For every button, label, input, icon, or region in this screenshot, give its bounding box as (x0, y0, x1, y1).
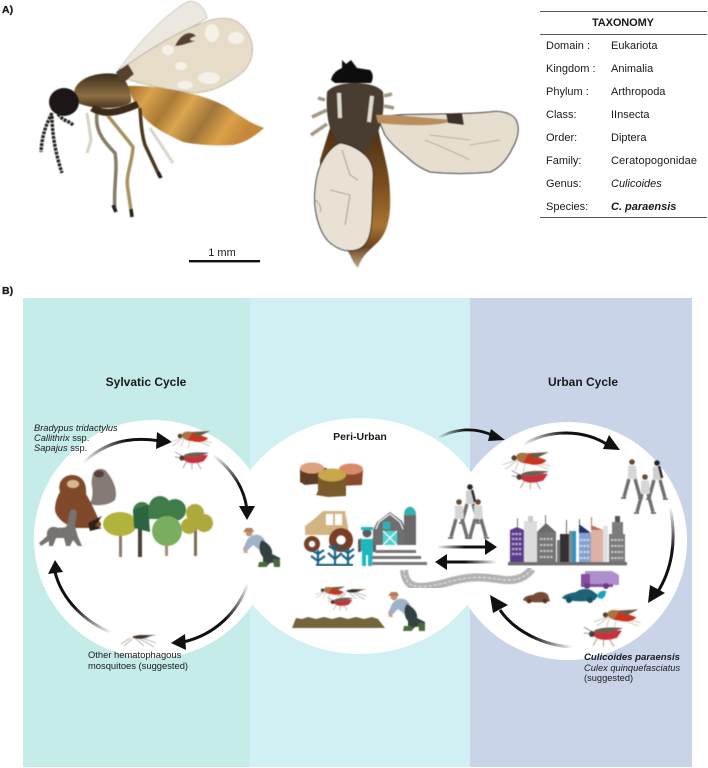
sylvatic host labels: Bradypus tridactylus (34, 423, 118, 433)
mosquitoes: peri-urban (315, 586, 366, 610)
forest trees (103, 496, 213, 557)
urban vector label: Culex quinquefasciatus (584, 663, 680, 673)
wing lower veins (316, 150, 358, 225)
thorax pale stripes (339, 93, 372, 122)
marmoset face (94, 470, 104, 478)
crop plants (311, 545, 354, 565)
thorax (327, 83, 384, 153)
taxonomy table: Animalia (611, 63, 654, 75)
taxonomy table: Species: (546, 201, 588, 213)
tractor (304, 511, 353, 552)
taxonomy table: Phylum : (546, 86, 589, 98)
sylvatic host labels: Callithrix ssp. (34, 433, 89, 443)
mosquitoes: sylvatic vectors (121, 431, 212, 647)
taxonomy table: Class: (546, 109, 577, 121)
thorax (74, 73, 131, 108)
taxonomy table: TAXONOMY (592, 17, 655, 29)
wing right dark mark (446, 113, 464, 125)
taxonomy table: Kingdom : (546, 63, 596, 75)
taxonomy table: IInsecta (611, 109, 650, 121)
capuchin (39, 509, 82, 546)
other mosquitoes label: Other hematophagous (88, 649, 182, 660)
wing spots (162, 24, 244, 89)
abdomen (128, 86, 264, 145)
panel background: peri-urban (250, 298, 470, 767)
hind wing (118, 1, 207, 70)
heading: Urban Cycle: Urban Cycle (548, 375, 618, 389)
wing right veins (425, 135, 500, 160)
antennae and palps (41, 113, 73, 173)
three overlapping white circles (34, 418, 687, 660)
panel background: sylvatic (23, 298, 250, 767)
legs (97, 112, 116, 210)
garbage truck (581, 571, 619, 589)
scale bar (189, 247, 260, 262)
urban vector label: (suggested) (584, 673, 633, 683)
wing dark mark (175, 33, 196, 46)
tree stumps (300, 462, 363, 497)
barn and silo (372, 507, 427, 565)
panel background: urban (470, 298, 692, 767)
taxonomy table: Family: (546, 155, 581, 167)
transfer arrows (435, 429, 505, 570)
scale bar: 1 mm (208, 247, 236, 259)
scutellum tuft (116, 64, 134, 84)
urban vector label: Culicoides paraensis (584, 652, 680, 663)
other mosquitoes label: mosquitoes (suggested) (88, 660, 188, 671)
taxonomy table: Diptera (611, 132, 647, 144)
wing right costal band (376, 115, 455, 125)
taxonomy table: Eukariota (611, 40, 658, 52)
other mosquitoes label (88, 649, 188, 671)
sylvatic host labels: Sapajus ssp. (34, 443, 87, 453)
panel A: side view of Culicoides paraensis (41, 1, 264, 217)
taxonomy table: Culicoides (611, 178, 662, 190)
sylvatic cycle arrows (48, 432, 255, 650)
brown car (523, 592, 550, 603)
walkers upper right (621, 459, 668, 513)
fore wing (120, 18, 252, 93)
sloth and monkeys (39, 469, 116, 546)
mosquitoes: urban vectors (503, 452, 641, 647)
building windows (512, 534, 623, 558)
farmer between sylvatic and peri-urban (243, 528, 280, 567)
sloth (55, 475, 101, 528)
panel label A: A) (2, 4, 13, 16)
teal car with exhaust (562, 589, 606, 603)
taxonomy table: Genus: (546, 178, 581, 190)
wing right (378, 111, 518, 174)
urban vector label (584, 652, 680, 683)
marmoset (89, 469, 116, 505)
head (49, 88, 79, 116)
panel A: dorsal view of Culicoides paraensis (311, 60, 518, 268)
heading: Peri-Urban: Peri-Urban (333, 431, 387, 443)
leg stubs (311, 94, 394, 135)
sloth face (67, 480, 79, 488)
farmer with overalls (358, 527, 376, 566)
abdomen (320, 128, 390, 268)
urban cycle arrows (490, 433, 673, 647)
heading: Sylvatic Cycle: Sylvatic Cycle (106, 375, 187, 389)
sloth claws (88, 516, 102, 531)
farmer in field (388, 592, 425, 631)
sylvatic host labels (34, 423, 118, 453)
taxonomy table: Domain : (546, 40, 590, 52)
taxonomy table (540, 11, 707, 218)
head (331, 60, 373, 83)
city skyline (508, 515, 627, 565)
taxonomy table: Order: (546, 132, 577, 144)
field soil (292, 617, 385, 628)
taxonomy table: Ceratopogonidae (611, 155, 697, 167)
walkers between peri-urban and urban (448, 484, 489, 538)
wing lower (315, 143, 373, 251)
panel label B: B) (2, 285, 13, 297)
taxonomy table: Arthropoda (611, 86, 666, 98)
taxonomy table: C. paraensis (611, 201, 676, 213)
road (404, 569, 532, 587)
